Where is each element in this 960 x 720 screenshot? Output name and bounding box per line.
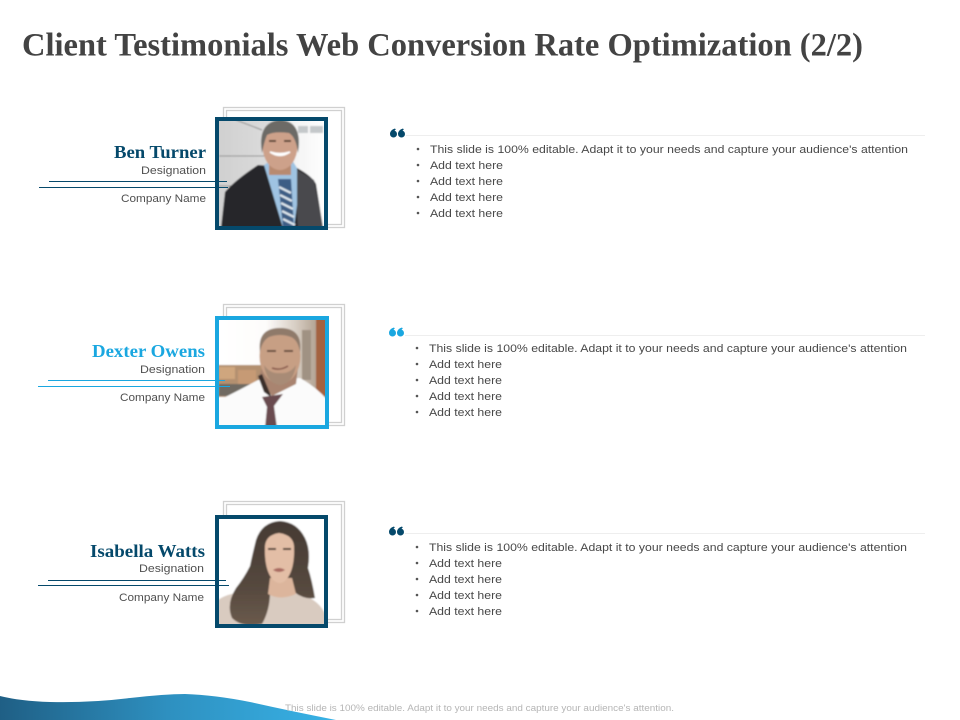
photo: Dexter Owens xyxy=(219,320,325,425)
designation: Designation xyxy=(140,364,205,376)
name: Dexter Owens xyxy=(92,341,205,361)
bullet list: Add text here xyxy=(430,192,503,204)
panel: Dexter Owens profile xyxy=(38,304,344,430)
bullet list xyxy=(417,144,908,220)
title: Client Testimonials Web Conversion Rate Optimization (2/2) xyxy=(22,28,863,64)
designation: Designation xyxy=(139,563,204,575)
bullet list: Add text here xyxy=(430,176,503,188)
bullet list: Add text here xyxy=(429,359,502,371)
name: Isabella Watts xyxy=(90,541,205,561)
bullet list: Add text here xyxy=(429,407,502,419)
divider lines xyxy=(38,380,230,386)
company name: Company Name xyxy=(120,392,205,404)
panel: Isabella Watts profile xyxy=(38,502,344,630)
icon: quotation mark xyxy=(390,128,405,138)
bullet list: Add text here xyxy=(429,574,502,586)
bullet list: Add text here xyxy=(429,375,502,387)
icon: quotation mark xyxy=(389,526,404,536)
bullet list xyxy=(416,542,907,618)
panel: Ben Turner profile xyxy=(39,108,344,230)
bullet list xyxy=(416,343,907,419)
icon: grey photo backing frame xyxy=(224,502,344,622)
photo: Ben Turner xyxy=(219,121,324,226)
panel: Dexter Owens testimonial xyxy=(389,328,925,419)
icon: grey photo backing frame xyxy=(224,304,344,426)
bullet list: Add text here xyxy=(429,606,502,618)
icon: grey photo backing frame xyxy=(224,108,344,228)
bullet list: This slide is 100% editable. Adapt it to your needs and capture your audience's attention xyxy=(429,343,907,355)
divider lines xyxy=(38,580,229,586)
name: Ben Turner xyxy=(114,142,206,162)
bullet list: Add text here xyxy=(429,558,502,570)
panel: Isabella Watts testimonial xyxy=(389,526,925,618)
footer note: This slide is 100% editable. Adapt it to your needs and capture your audience's attention. xyxy=(285,703,674,713)
bullet list: This slide is 100% editable. Adapt it to your needs and capture your audience's attention xyxy=(430,144,908,156)
bullet list: This slide is 100% editable. Adapt it to your needs and capture your audience's attention xyxy=(429,542,907,554)
bullet list: Add text here xyxy=(429,590,502,602)
icon: navy photo border xyxy=(217,517,326,626)
icon: blue photo border xyxy=(217,318,327,427)
designation: Designation xyxy=(141,165,206,177)
panel: Ben Turner testimonial xyxy=(390,128,925,220)
footer wave xyxy=(0,694,336,720)
bullet list: Add text here xyxy=(430,208,503,220)
bullet list: Add text here xyxy=(429,391,502,403)
company name: Company Name xyxy=(121,193,206,205)
icon: quotation mark xyxy=(389,328,404,336)
bullet list: Add text here xyxy=(430,160,503,172)
company name: Company Name xyxy=(119,592,204,604)
icon: navy photo border xyxy=(217,119,326,228)
photo: Isabella Watts xyxy=(219,519,324,624)
divider lines xyxy=(39,182,228,188)
